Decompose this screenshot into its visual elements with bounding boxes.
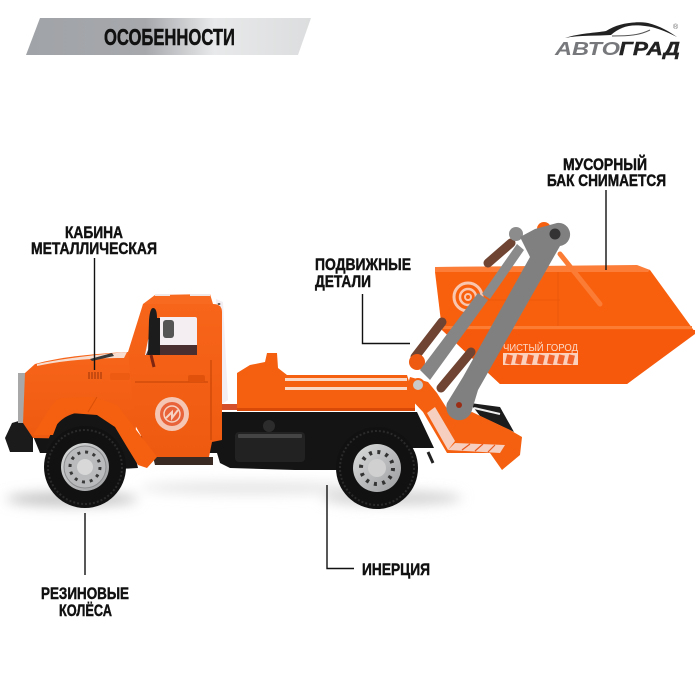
logo: Avtograd: ® (673, 23, 679, 31)
roof (143, 294, 213, 304)
chassis (33, 412, 434, 470)
gray lift arms (412, 223, 570, 420)
label: inertia (327, 485, 430, 579)
bin text: ЧИСТЫЙ ГОРОД (503, 341, 578, 354)
rear wheel (336, 427, 418, 509)
waste bin (435, 254, 695, 384)
label: metal cab: КАБИНА (65, 224, 123, 242)
label: removable bin (547, 155, 666, 270)
label: removable bin: МУСОРНЫЙ (563, 155, 647, 174)
logo: Avtograd: ГРАД (619, 39, 680, 59)
label: rubber wheels: КОЛЁСА (59, 602, 112, 620)
label: metal cab (31, 224, 157, 370)
banner heading (26, 18, 311, 55)
hood (23, 352, 140, 440)
label: inertia: ИНЕРЦИЯ (362, 561, 430, 579)
label: rubber wheels: РЕЗИНОВЫЕ (41, 585, 129, 603)
front wheel (44, 426, 126, 508)
banner heading: ОСОБЕННОСТИ (104, 24, 235, 50)
rear orange bracket (407, 354, 522, 470)
wheel arch (45, 412, 138, 470)
label: moving parts: ДЕТАЛИ (315, 273, 371, 291)
cargo bed (237, 353, 415, 410)
orange top pivot (537, 222, 551, 236)
label: moving parts: ПОДВИЖНЫЕ (315, 256, 411, 274)
mirror (148, 308, 160, 355)
cab body (128, 304, 222, 457)
grille (18, 373, 25, 423)
hood vent (89, 372, 101, 379)
ground shadow (6, 482, 462, 506)
door emblem (155, 397, 189, 431)
bin emblem (454, 283, 482, 311)
label: removable bin: БАК СНИМАЕТСЯ (547, 172, 666, 190)
label: metal cab: МЕТАЛЛИЧЕСКАЯ (31, 240, 157, 258)
fender (33, 397, 157, 468)
cab white rear panel (214, 299, 228, 404)
logo: Avtograd: АВТО (554, 39, 620, 59)
window (145, 317, 197, 355)
truck (5, 222, 695, 509)
logo: Avtograd (554, 22, 680, 59)
label: rubber wheels (41, 513, 129, 620)
front bumper (5, 420, 33, 452)
brown rods (415, 243, 511, 388)
label: moving parts (315, 256, 411, 344)
door lines (135, 360, 211, 440)
